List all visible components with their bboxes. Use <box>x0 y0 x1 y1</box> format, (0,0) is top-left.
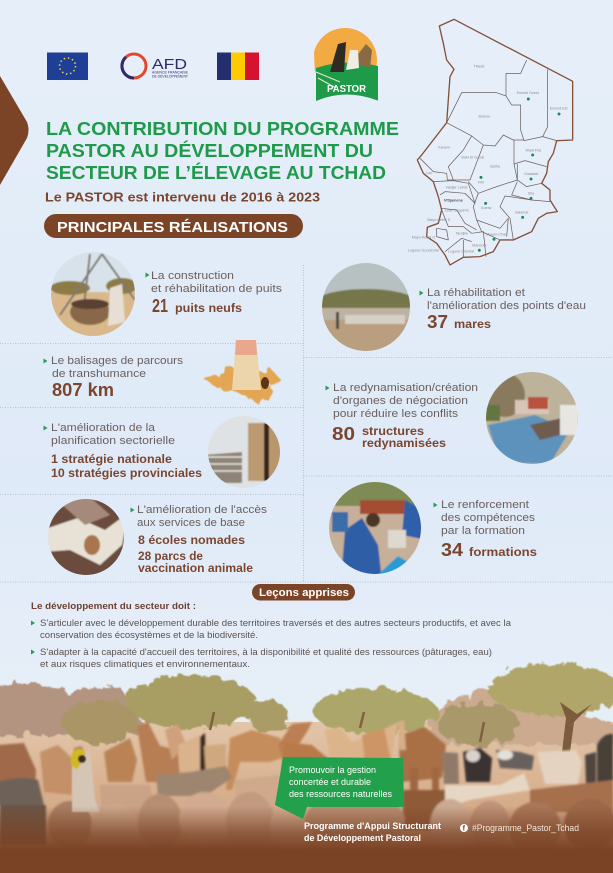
central camels <box>226 730 285 790</box>
map of Chad: Fitri <box>478 180 484 184</box>
logo: PASTOR: PASTOR <box>327 83 366 95</box>
landscape photo: camels and herd <box>0 664 613 873</box>
map of Chad: Chari Baguirmi <box>445 209 469 213</box>
panel: points d'eau: mares <box>454 319 491 331</box>
lessons text: conservation des écosystèmes et de la biodiversité. <box>40 630 258 640</box>
panel: balisage: de transhumance <box>52 368 146 380</box>
panel: balisage: Le balisages de parcours <box>51 355 184 367</box>
logo: AFD: DE DÉVELOPPEMENT <box>152 74 189 78</box>
far-left camels <box>0 743 36 795</box>
panel: planification <box>44 416 280 488</box>
panel: planification: 1 stratégie nationale <box>51 454 172 466</box>
panel: services de base: vaccination animale <box>138 563 253 575</box>
panel: points d'eau <box>322 263 586 351</box>
title: PASTOR AU DÉVELOPPEMENT DU <box>46 140 373 161</box>
panel: organes de négociation: 80 <box>332 424 355 444</box>
map of Chad: Logone Occidental <box>408 248 439 252</box>
panel: planification: planification sectorielle <box>51 435 175 447</box>
green callout box: concertée et durable <box>289 777 371 787</box>
green callout box: Promouvoir la gestion <box>289 765 376 775</box>
map of Chad: Guera <box>481 206 492 210</box>
lessons text: S'articuler avec le développement durable des territoires traversés et des autres secteurs productifs, et avec la <box>40 618 511 628</box>
decorative left tab <box>0 76 28 185</box>
social hashtag: #Programme_Pastor_Tchad <box>472 823 579 833</box>
map of Chad: N'Djamena <box>444 199 464 203</box>
photo: water point <box>322 263 410 351</box>
panel: balisage: 807 km <box>52 380 114 400</box>
panel: services de base <box>48 499 266 575</box>
photo: beacon <box>200 340 284 403</box>
map of Chad: Tandjile <box>455 232 468 236</box>
map of Chad: Borkou <box>479 114 490 118</box>
panel: services de base: 28 parcs de <box>138 551 203 563</box>
photo: vaccination <box>48 499 124 575</box>
map of Chad: Sila <box>528 191 535 195</box>
programme name: Programme d'Appui Structurant <box>304 821 441 831</box>
logo: AFD <box>122 54 189 78</box>
panel: services de base: 8 écoles nomades <box>138 535 245 547</box>
green callout box: des ressources naturelles <box>289 789 392 799</box>
map of Chad: Moyen-Chari <box>486 232 507 236</box>
lessons text: Le développement du secteur doit : <box>31 601 196 611</box>
logo: AFD: AFD <box>152 56 187 73</box>
logo: PASTOR <box>313 28 378 101</box>
mid row <box>156 766 232 796</box>
panel: organes de négociation <box>326 372 578 464</box>
panel: puits <box>51 252 282 336</box>
map of Chad: Wadi Fira <box>526 148 542 152</box>
map of Chad: Tibesti <box>474 64 484 68</box>
panel: points d'eau: l'amélioration des points d'eau <box>427 300 586 312</box>
map of Chad: Kanem <box>438 145 450 149</box>
panel: organes de négociation: La redynamisation/création <box>333 382 478 394</box>
panel: formation <box>329 482 536 574</box>
heading pill: principales réalisations <box>44 214 303 238</box>
panel: formation: Le renforcement <box>441 499 529 511</box>
heading pill: principales réalisations: PRINCIPALES RÉALISATIONS <box>57 219 288 236</box>
map of Chad: Salamat <box>515 210 528 214</box>
map of Chad: Lac <box>426 171 432 175</box>
map of Chad: Mandoul <box>472 244 487 248</box>
logo: AFD: AGENCE FRANÇAISE <box>152 70 189 74</box>
map of Chad: Hadjer Lamis <box>446 185 468 189</box>
map of Chad: Ennedi Ouest <box>517 91 539 95</box>
panel: services de base: L'amélioration de l'accès <box>137 504 268 516</box>
panel: formation: des compétences <box>441 512 536 524</box>
panel: formation: par la formation <box>441 525 525 537</box>
panel: puits: 21 <box>152 296 168 316</box>
panel: balisage <box>44 340 284 403</box>
map of Chad: Bahr El Gazal <box>461 155 484 159</box>
panel: points d'eau: La réhabilitation et <box>427 287 525 299</box>
map of Chad: Ennedi Est <box>550 106 567 110</box>
panel: organes de négociation: d'organes de négociation <box>333 395 468 407</box>
panel: puits: puits neufs <box>175 303 242 315</box>
panel: organes de négociation: redynamisées <box>362 438 446 450</box>
logo: European Union flag <box>47 52 88 80</box>
panel: planification: L'amélioration de la <box>51 422 156 434</box>
programme name <box>304 821 441 843</box>
map of Chad: Mayo-Kebbi O. <box>412 235 436 239</box>
panel: formation: 34 <box>441 540 463 560</box>
panel: puits: La construction <box>151 270 234 282</box>
map of Chad: Batha <box>490 165 501 169</box>
photo: training <box>329 482 421 574</box>
photo: meeting <box>486 372 578 464</box>
social hashtag: f <box>463 826 466 832</box>
map of Chad <box>408 19 573 265</box>
lessons text: S'adapter à la capacité d'accueil des territoires, à la disponibilité et qualité des ressources (pâturages, eau) <box>40 647 492 657</box>
green callout box <box>275 757 404 819</box>
sheep <box>48 801 92 849</box>
lessons text <box>31 601 511 669</box>
programme name: de Développement Pastoral <box>304 833 421 843</box>
panel: puits: et réhabilitation de puits <box>151 283 283 295</box>
map of Chad: Mayo-Kebbi E. <box>427 218 451 222</box>
map of Chad: Logone Oriental <box>448 250 474 254</box>
logo: Chad flag <box>217 52 259 80</box>
goats right <box>442 752 459 784</box>
title: LA CONTRIBUTION DU PROGRAMME <box>46 118 399 139</box>
heading pill: leçons apprises <box>252 584 355 600</box>
panel: formation: formations <box>469 547 537 559</box>
photo: well <box>51 252 135 336</box>
map of Chad: Ouaddaï <box>524 172 539 176</box>
panel: services de base: aux services de base <box>137 517 245 529</box>
lessons text: et aux risques climatiques et environnementaux. <box>40 659 250 669</box>
photo: documents <box>208 416 280 488</box>
heading pill: leçons apprises: Leçons apprises <box>259 587 349 599</box>
panel: planification: 10 stratégies provinciales <box>51 468 202 480</box>
title <box>46 118 399 183</box>
panel: organes de négociation: structures <box>362 426 424 438</box>
panel: organes de négociation: pour réduire les conflits <box>333 408 459 420</box>
title: SECTEUR DE L’ÉLEVAGE AU TCHAD <box>46 162 386 183</box>
subtitle: Le PASTOR est intervenu de 2016 à 2023 <box>45 190 320 204</box>
panel: points d'eau: 37 <box>427 312 448 332</box>
